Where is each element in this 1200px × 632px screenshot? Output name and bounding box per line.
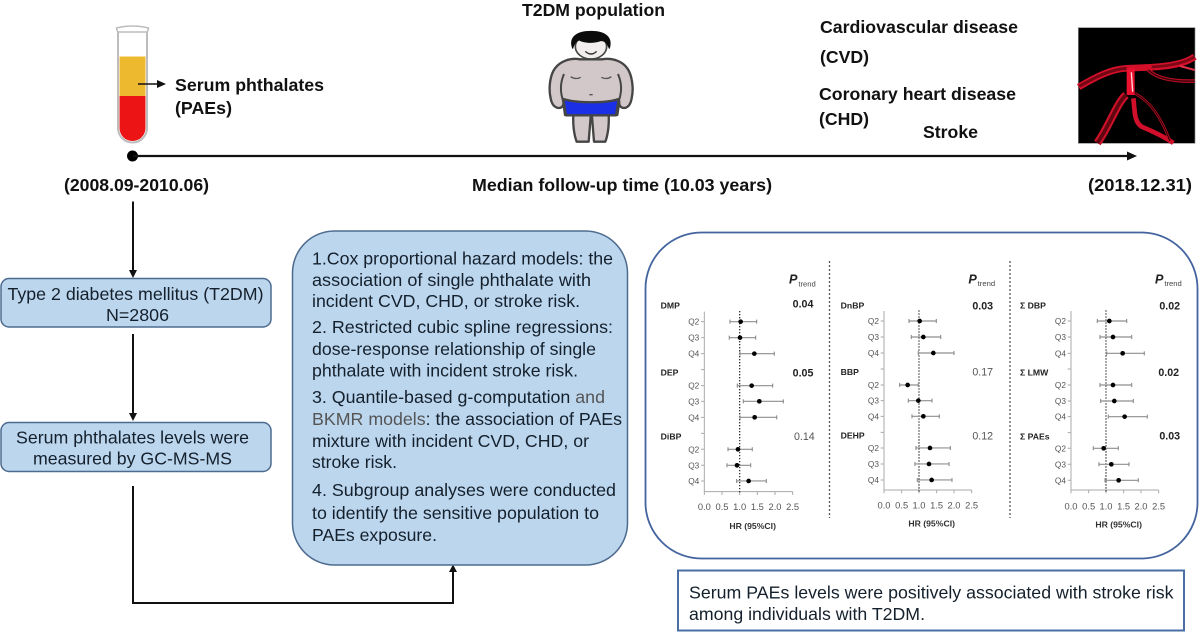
method 3: mixture with incident CVD, CHD, or	[312, 431, 589, 451]
forest plot: sum DBP LMW PAEs: HR (95%CI)	[1095, 520, 1142, 530]
forest plot: DnBP BBP DEHP	[841, 272, 995, 529]
forest plot: sum DBP LMW PAEs: 0.5	[1082, 501, 1095, 511]
forest plot: DMP DEP DiBP: DEP	[661, 367, 679, 377]
label: end date: (2018.12.31)	[1088, 175, 1192, 195]
forest plot: DnBP BBP DEHP: DEHP	[841, 430, 865, 440]
forest plot: sum DBP LMW PAEs: Q2	[1055, 316, 1066, 326]
box: serum measurement	[1, 422, 271, 472]
forest plot: DnBP BBP DEHP: Q4	[868, 475, 879, 485]
forest plot: sum DBP LMW PAEs: Q4	[1055, 412, 1066, 422]
forest plot: DMP DEP DiBP: 2.5	[786, 502, 799, 512]
method 2: phthalate with incident stroke risk.	[312, 360, 578, 380]
label: cardiovascular disease: (CVD)	[820, 47, 869, 67]
forest plot: DMP DEP DiBP: 1.0	[733, 502, 746, 512]
panel: statistical methods	[292, 231, 628, 565]
forest plot: DMP DEP DiBP: Q4	[688, 349, 700, 359]
forest plot: sum DBP LMW PAEs: Σ LMW	[1020, 368, 1049, 378]
forest plot: sum DBP LMW PAEs: 0.03	[1159, 430, 1180, 442]
forest plot: DMP DEP DiBP: HR (95%CI)	[729, 521, 776, 531]
forest plot: DnBP BBP DEHP: trend	[978, 279, 995, 288]
box: T2DM cohort: N=2806	[106, 305, 169, 325]
label: serum phthalates: Serum phthalates	[175, 75, 324, 95]
forest plot: sum DBP LMW PAEs: 2.0	[1135, 501, 1147, 511]
forest plot: DMP DEP DiBP: 0.05	[793, 368, 813, 380]
forest plot: DMP DEP DiBP: 0.5	[716, 502, 728, 512]
forest plot: sum DBP LMW PAEs: 0.02	[1159, 300, 1180, 312]
forest plot: sum DBP LMW PAEs: Q2	[1055, 443, 1066, 453]
label: stroke: Stroke	[923, 122, 978, 142]
forest plot: DMP DEP DiBP: 2.0	[769, 502, 781, 512]
forest plot: sum DBP LMW PAEs: 1.0	[1100, 501, 1112, 511]
forest plot: sum DBP LMW PAEs: trend	[1164, 279, 1182, 288]
forest plot: DMP DEP DiBP: DiBP	[661, 431, 682, 441]
timeline arrow	[127, 150, 1137, 162]
forest plot: DMP DEP DiBP: Q2	[688, 381, 700, 391]
forest plot: DnBP BBP DEHP: Q4	[868, 411, 879, 421]
arrow: T2DM box to serum box	[129, 334, 137, 421]
forest plot: sum DBP LMW PAEs: Σ DBP	[1020, 300, 1046, 310]
forest plot: DnBP BBP DEHP: 0.03	[972, 300, 993, 312]
forest plot: sum DBP LMW PAEs: 0.02	[1158, 367, 1179, 379]
forest plot: DMP DEP DiBP: trend	[798, 279, 816, 288]
forest plot: DnBP BBP DEHP: BBP	[841, 367, 859, 377]
label: coronary heart disease: Coronary heart disease	[819, 84, 1016, 104]
method 1: association of single phthalate with	[312, 270, 591, 290]
forest plot: DnBP BBP DEHP: Q4	[868, 348, 879, 358]
forest plot: sum DBP LMW PAEs: Q4	[1055, 348, 1066, 358]
forest plot: DnBP BBP DEHP: DnBP	[841, 300, 864, 310]
forest plot: DMP DEP DiBP: Q2	[688, 317, 700, 327]
box: T2DM cohort	[1, 278, 271, 327]
arrow: tube to serum phthalates	[138, 80, 166, 88]
label: T2DM population: T2DM population	[522, 0, 665, 20]
forest plot: DnBP BBP DEHP: 0.0	[878, 500, 890, 510]
forest plot: DMP DEP DiBP: Q2	[688, 444, 700, 454]
forest plot: DnBP BBP DEHP: Q3	[868, 459, 879, 469]
arrow: baseline to T2DM box	[129, 202, 137, 278]
forest plot: sum DBP LMW PAEs: 2.5	[1152, 501, 1165, 511]
forest plot: DMP DEP DiBP: Q4	[688, 412, 700, 422]
forest plot: sum DBP LMW PAEs: Q3	[1055, 396, 1066, 406]
box: conclusion	[678, 570, 1184, 630]
label: baseline date: (2008.09-2010.06)	[64, 175, 209, 195]
forest plot: sum DBP LMW PAEs	[1020, 272, 1182, 530]
forest plot: DnBP BBP DEHP: Q2	[868, 380, 879, 390]
box: conclusion: Serum PAEs levels were positively associated with stroke risk	[689, 582, 1174, 602]
method 1: incident CVD, CHD, or stroke risk.	[312, 291, 580, 311]
forest plot: DnBP BBP DEHP: 0.12	[972, 430, 993, 442]
arrow: serum box to methods	[133, 486, 457, 603]
box: serum measurement: Serum phthalates levels were	[16, 428, 249, 448]
box: T2DM cohort: Type 2 diabetes mellitus (T2DM)	[8, 284, 264, 304]
forest plot: DnBP BBP DEHP: Q2	[868, 316, 879, 326]
forest plot: DnBP BBP DEHP: 1.5	[930, 500, 943, 510]
forest plot: sum DBP LMW PAEs: 1.5	[1117, 501, 1130, 511]
forest plot: DMP DEP DiBP: Q3	[688, 396, 700, 406]
forest plot: DnBP BBP DEHP: 2.5	[965, 500, 978, 510]
label: coronary heart disease: (CHD)	[819, 109, 869, 129]
method 4: 4. Subgroup analyses were conducted	[312, 480, 616, 500]
forest plot: DMP DEP DiBP: DMP	[661, 301, 680, 311]
method 4: to identify the sensitive population to	[312, 503, 599, 523]
forest plot: DnBP BBP DEHP: 0.17	[972, 366, 993, 378]
forest plot: DMP DEP DiBP: 0.0	[698, 502, 711, 512]
forest plot: DnBP BBP DEHP: P	[968, 272, 977, 286]
forest plot: DnBP BBP DEHP: 0.5	[895, 500, 908, 510]
forest plot: sum DBP LMW PAEs: Σ PAEs	[1020, 431, 1050, 441]
forest plot: sum DBP LMW PAEs: Q3	[1055, 459, 1066, 469]
forest plot: sum DBP LMW PAEs: Q2	[1055, 380, 1066, 390]
method 2: 2. Restricted cubic spline regressions:	[312, 317, 613, 337]
forest plot: DMP DEP DiBP	[661, 273, 816, 531]
label: serum phthalates: (PAEs)	[175, 98, 232, 118]
icon: overweight person	[550, 31, 633, 142]
icon: test tube	[116, 26, 148, 142]
forest plot: sum DBP LMW PAEs: 0.0	[1065, 501, 1077, 511]
forest plot: DMP DEP DiBP: P	[789, 273, 798, 287]
forest plot: DnBP BBP DEHP: 1.0	[913, 500, 925, 510]
method 3: stroke risk.	[312, 452, 397, 472]
forest plot: sum DBP LMW PAEs: Q3	[1055, 332, 1066, 342]
forest plot: DnBP BBP DEHP: Q3	[868, 332, 879, 342]
panel: forest plots	[646, 232, 1198, 558]
method 4: PAEs exposure.	[312, 525, 437, 545]
forest plot: DMP DEP DiBP: Q3	[688, 460, 700, 470]
image: blood vessels	[1078, 28, 1195, 143]
box: serum measurement: measured by GC-MS-MS	[33, 448, 232, 468]
forest plot: DMP DEP DiBP: 1.5	[751, 502, 764, 512]
forest plot: DMP DEP DiBP: Q4	[688, 476, 700, 486]
label: cardiovascular disease: Cardiovascular disease	[820, 17, 1018, 37]
forest plot: DnBP BBP DEHP: Q3	[868, 396, 879, 406]
forest plot: DnBP BBP DEHP: 2.0	[948, 500, 960, 510]
forest plot: DnBP BBP DEHP: Q2	[868, 443, 879, 453]
method 2: dose-response relationship of single	[312, 339, 596, 359]
forest plot: sum DBP LMW PAEs: P	[1155, 272, 1164, 286]
forest plot: DMP DEP DiBP: Q3	[688, 333, 700, 343]
forest plot: DMP DEP DiBP: 0.14	[794, 431, 815, 443]
forest plot: DMP DEP DiBP: 0.04	[793, 298, 813, 310]
label: median follow-up: Median follow-up time (10.03 years)	[472, 175, 772, 195]
method 1: 1.Cox proportional hazard models: the	[312, 248, 613, 268]
box: conclusion: among individuals with T2DM.	[689, 604, 925, 624]
forest plot: DnBP BBP DEHP: HR (95%CI)	[908, 519, 955, 529]
method 3: BKMR models: the association of PAEs	[312, 409, 622, 429]
forest plot: sum DBP LMW PAEs: Q4	[1055, 475, 1066, 485]
method 3: 3. Quantile-based g-computation and	[312, 387, 605, 407]
